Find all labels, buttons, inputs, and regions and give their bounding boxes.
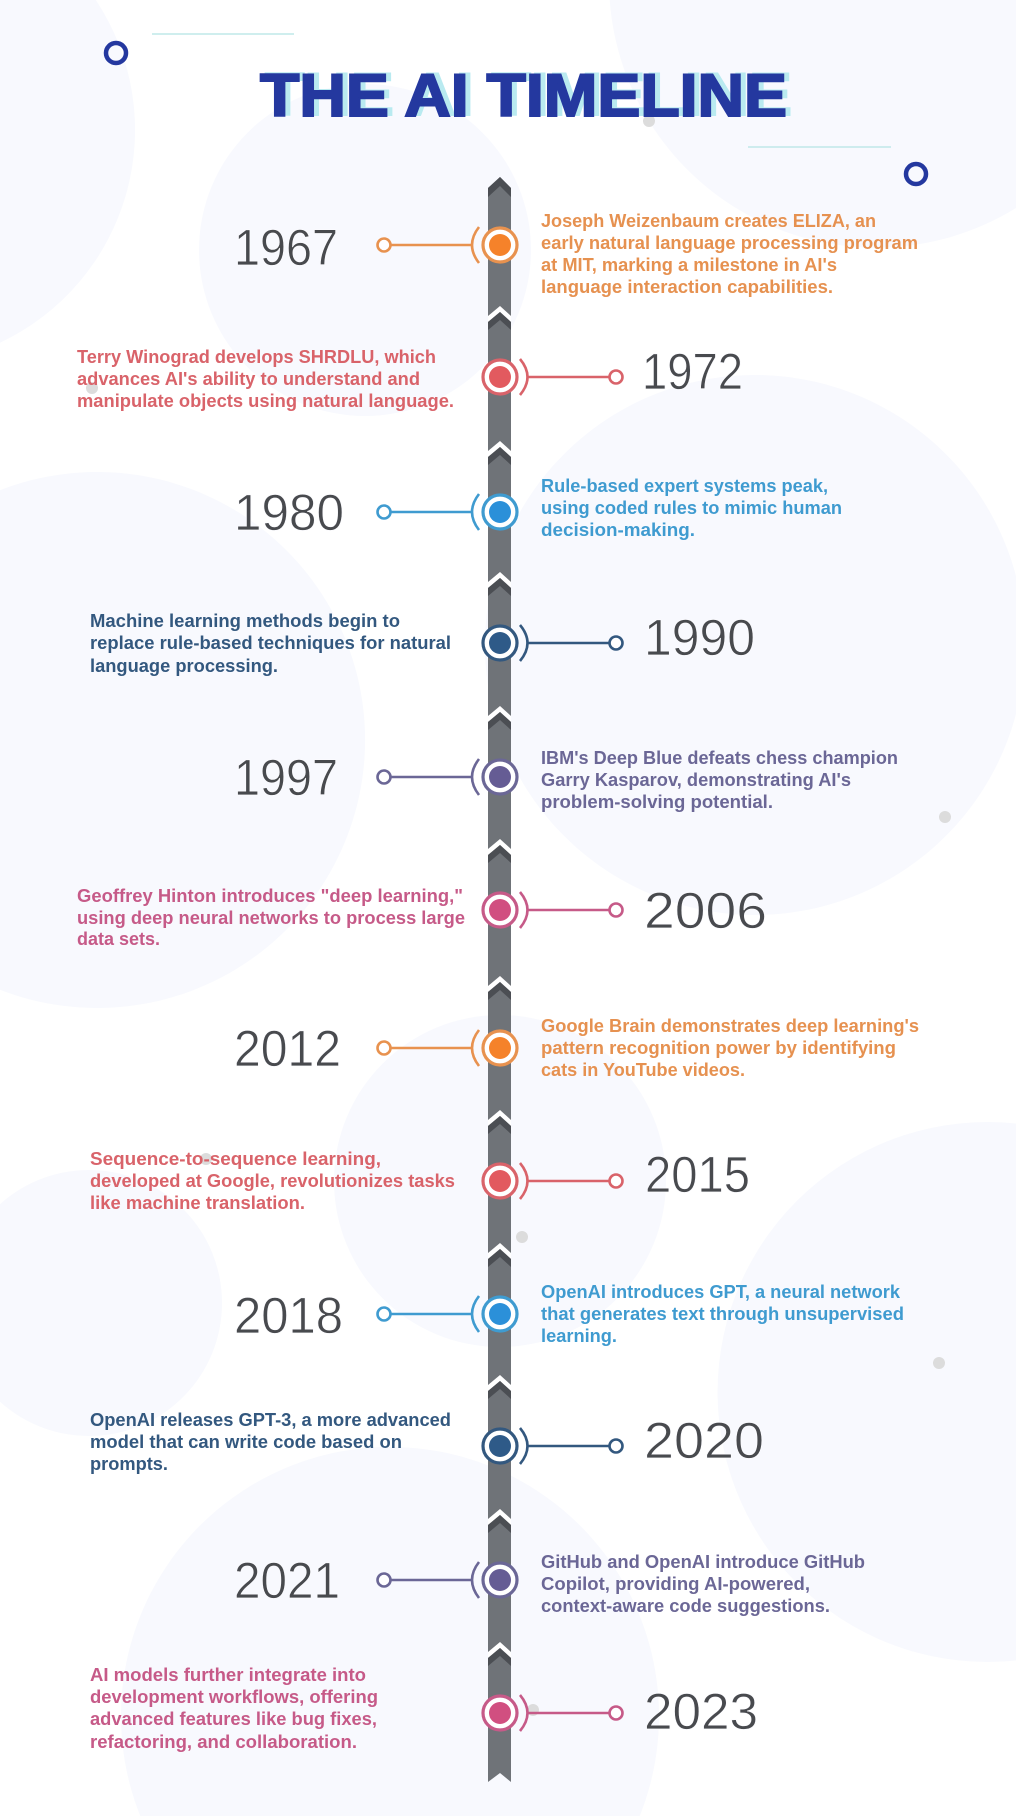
title: THE AI TIMELINE: [260, 62, 787, 129]
description 2020: OpenAI releases GPT-3, a more advanced: [90, 1410, 451, 1430]
description 2012: [541, 1016, 919, 1080]
description 2006: using deep neural networks to process large: [77, 908, 465, 928]
description 1980: [541, 476, 842, 540]
description 2020: model that can write code based on: [90, 1432, 402, 1452]
year 1990: 1990: [644, 609, 755, 666]
entry: 1990: [90, 609, 755, 676]
timeline spine: [488, 177, 511, 1782]
description 2015: [90, 1149, 455, 1213]
description 2006: data sets.: [77, 929, 160, 949]
description 2012: Google Brain demonstrates deep learning's: [541, 1016, 919, 1036]
description 2021: Copilot, providing AI-powered,: [541, 1574, 810, 1594]
entry: 2015: [90, 1146, 750, 1213]
icon: decorative ring top left: [106, 43, 126, 63]
description 2018: OpenAI introduces GPT, a neural network: [541, 1282, 901, 1302]
description 1980: using coded rules to mimic human: [541, 498, 842, 518]
description 1990: replace rule-based techniques for natural: [90, 633, 451, 653]
description 1967: early natural language processing program: [541, 233, 918, 253]
description 2012: cats in YouTube videos.: [541, 1060, 745, 1080]
description 1990: [90, 611, 451, 676]
connector 2018: [378, 1296, 517, 1332]
year 2015: 2015: [645, 1146, 750, 1203]
description 1997: IBM's Deep Blue defeats chess champion: [541, 748, 898, 768]
connector 1972: [483, 359, 622, 395]
entry: 2023: [90, 1665, 758, 1752]
description 2020: [90, 1410, 451, 1474]
description 2018: [541, 1282, 904, 1346]
description 2021: context-aware code suggestions.: [541, 1596, 830, 1616]
description 2020: prompts.: [90, 1454, 168, 1474]
description 1967: at MIT, marking a milestone in AI's: [541, 255, 837, 275]
description 1990: Machine learning methods begin to: [90, 611, 400, 631]
year 2023: 2023: [644, 1683, 758, 1740]
year 2012: 2012: [234, 1020, 341, 1077]
entry: 2021: [234, 1552, 865, 1616]
entry: 2020: [90, 1410, 764, 1474]
description 1997: [541, 748, 898, 812]
description 2018: that generates text through unsupervised: [541, 1304, 904, 1324]
entry: 2012: [234, 1016, 919, 1080]
year 2021: 2021: [234, 1552, 340, 1609]
description 2023: refactoring, and collaboration.: [90, 1732, 357, 1752]
description 1990: language processing.: [90, 656, 278, 676]
description 2023: advanced features like bug fixes,: [90, 1709, 377, 1729]
description 1997: problem-solving potential.: [541, 792, 773, 812]
description 1980: decision-making.: [541, 520, 695, 540]
description 2023: [90, 1665, 378, 1752]
description 2015: Sequence-to-sequence learning,: [90, 1149, 381, 1169]
description 2015: like machine translation.: [90, 1193, 305, 1213]
description 1980: Rule-based expert systems peak,: [541, 476, 828, 496]
year 1980: 1980: [234, 484, 344, 541]
description 1967: language interaction capabilities.: [541, 277, 833, 297]
entry: 2018: [234, 1282, 904, 1346]
description 2015: developed at Google, revolutionizes tasks: [90, 1171, 455, 1191]
entry: 1980: [234, 476, 842, 541]
description 2012: pattern recognition power by identifying: [541, 1038, 896, 1058]
description 2023: AI models further integrate into: [90, 1665, 366, 1685]
connector 2020: [483, 1428, 622, 1464]
year 1997: 1997: [234, 749, 338, 806]
description 2023: development workflows, offering: [90, 1687, 378, 1707]
description 1967: [541, 211, 918, 297]
description 2021: [541, 1552, 865, 1616]
year 2020: 2020: [644, 1412, 764, 1469]
year 1967: 1967: [234, 219, 338, 276]
connector 2023: [483, 1695, 622, 1731]
description 1972: Terry Winograd develops SHRDLU, which: [77, 347, 436, 367]
description 1972: advances AI's ability to understand and: [77, 369, 420, 389]
entry: 1972: [77, 343, 743, 411]
connector 2006: [483, 892, 622, 928]
description 2018: learning.: [541, 1326, 617, 1346]
description 1972: [77, 347, 454, 411]
description 2021: GitHub and OpenAI introduce GitHub: [541, 1552, 865, 1572]
entry: 2006: [77, 882, 767, 949]
description 1967: Joseph Weizenbaum creates ELIZA, an: [541, 211, 876, 231]
year 2018: 2018: [234, 1287, 343, 1344]
description 1972: manipulate objects using natural language.: [77, 391, 454, 411]
connector 1997: [378, 759, 517, 795]
entry: 1967: [234, 211, 918, 297]
connector 1980: [378, 494, 517, 530]
connector 1967: [378, 227, 517, 263]
connector 2015: [483, 1163, 622, 1199]
year 1972: 1972: [642, 343, 743, 400]
connector 2012: [378, 1030, 517, 1066]
description 1997: Garry Kasparov, demonstrating AI's: [541, 770, 851, 790]
description 2006: [77, 886, 465, 949]
year 2006: 2006: [644, 882, 767, 939]
description 2006: Geoffrey Hinton introduces "deep learning,": [77, 886, 463, 906]
entry: 1997: [234, 748, 898, 812]
icon: decorative ring top right: [906, 164, 926, 184]
connector 2021: [378, 1562, 517, 1598]
connector 1990: [483, 625, 622, 661]
